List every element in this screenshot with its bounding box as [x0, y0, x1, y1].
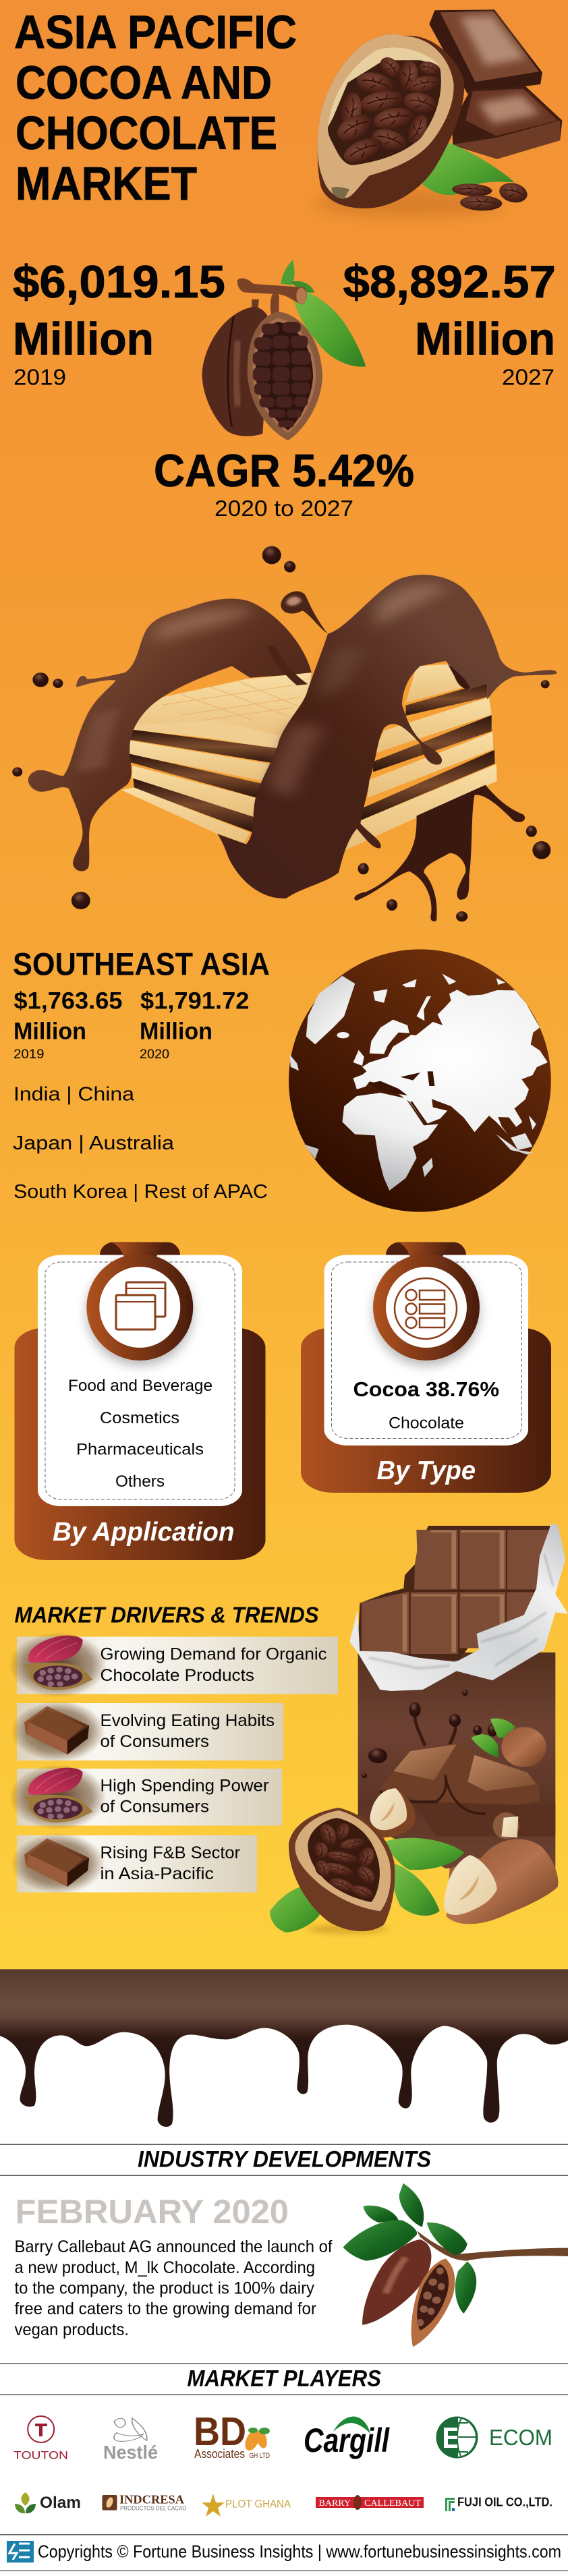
icon: cocoa pods	[9, 1632, 107, 1698]
logo: touton	[13, 2416, 68, 2462]
heading: market players: MARKET PLAYERS	[188, 2366, 381, 2392]
stat: CAGR: 2020 to 2027	[215, 496, 353, 521]
stat: southeast asia 2020	[140, 988, 250, 1062]
dashed border	[45, 1262, 235, 1499]
panel background	[15, 1327, 266, 1560]
heading: southeast asia: SOUTHEAST ASIA	[13, 946, 270, 982]
stat: CAGR	[154, 445, 414, 521]
title: COCOA AND	[16, 57, 272, 109]
stat: CAGR: CAGR 5.42%	[154, 445, 414, 496]
logo: bd associates	[194, 2409, 270, 2461]
logo: ecom	[436, 2416, 552, 2458]
stat: 2019 market size: $6,019.15	[13, 256, 225, 308]
logo: nestle: Nestlé	[103, 2442, 158, 2463]
list: applications: Pharmaceuticals	[76, 1441, 204, 1458]
banner: growing demand for organic chocolate products: Growing Demand for Organic	[100, 1644, 326, 1663]
list: applications	[68, 1377, 212, 1491]
banner: rising food and beverage sector: Rising F&B Sector	[100, 1843, 240, 1862]
logo: olam: Olam	[40, 2494, 81, 2512]
strap and ring	[86, 1242, 193, 1361]
banner: high spending power of consumers: High Spending Power	[100, 1777, 268, 1796]
text: development description: a new product, M_lk Chocolate. According	[15, 2258, 315, 2277]
chocolate drip band	[0, 1969, 568, 2127]
logo: plot ghana: PLOT GHANA	[225, 2497, 291, 2511]
list: applications: Cosmetics	[100, 1409, 179, 1427]
text: development description: free and caters to the growing demand for	[15, 2299, 316, 2318]
strap and ring	[373, 1242, 480, 1361]
banner: growing demand for organic chocolate products	[9, 1632, 338, 1698]
panel background	[301, 1327, 551, 1493]
icon: cocoa pods	[9, 1765, 107, 1830]
logo: barry callebaut	[316, 2495, 424, 2510]
list: countries: India | China	[13, 1083, 135, 1105]
logo: olam	[15, 2492, 81, 2513]
stat: cocoa share: Cocoa 38.76%	[353, 1377, 499, 1401]
logo: ecom: ECOM	[489, 2425, 552, 2450]
stat: southeast asia 2019: 2019	[13, 1048, 45, 1062]
banner: high spending power of consumers	[9, 1765, 282, 1830]
illustration: open cocoa pod with chocolate pieces	[315, 9, 562, 217]
icon: fortune business insights logo	[7, 2541, 34, 2563]
logo: nestle	[103, 2418, 158, 2463]
list: applications: Food and Beverage	[68, 1377, 212, 1395]
text: development description: Barry Callebaut AG announced the launch of	[15, 2237, 333, 2256]
list: applications: Others	[115, 1472, 165, 1491]
icon: chocolate piece	[11, 1701, 105, 1762]
page background	[0, 0, 568, 1970]
icon: globe	[289, 949, 551, 1212]
text: development description	[15, 2237, 333, 2339]
banner: evolving eating habits of consumers: of Consumers	[100, 1732, 209, 1751]
banner: evolving eating habits of consumers	[11, 1701, 283, 1762]
stat: 2027 market size: $8,892.57	[343, 256, 556, 308]
label: chocolate: Chocolate	[389, 1414, 464, 1433]
logo: bd associates: Associates	[194, 2447, 245, 2461]
stat: southeast asia 2019	[13, 988, 123, 1062]
stat: southeast asia 2019: $1,763.65	[13, 988, 123, 1014]
hanger loop	[100, 1242, 180, 1255]
icon: chocolate piece	[11, 1833, 105, 1894]
stat: 2019 market size: Million	[13, 313, 154, 364]
stat: 2019 market size: 2019	[13, 364, 66, 390]
white card	[324, 1255, 528, 1446]
banner: evolving eating habits of consumers: Evolving Eating Habits	[100, 1711, 275, 1730]
illustration: cocoa pods on branch	[202, 260, 366, 440]
stat: southeast asia 2020: Million	[140, 1019, 212, 1044]
logo: barry callebaut: BARRY	[318, 2498, 351, 2509]
list: countries: Japan | Australia	[13, 1133, 175, 1154]
stat: southeast asia 2020: 2020	[140, 1048, 169, 1062]
stat: southeast asia 2019: Million	[13, 1019, 86, 1044]
icon: windows	[116, 1282, 165, 1329]
footer: copyright	[0, 2534, 568, 2571]
stat: 2027 market size: Million	[415, 313, 555, 364]
panel: by type	[301, 1242, 551, 1493]
logo: cargill: Cargill	[304, 2422, 390, 2459]
stat: southeast asia 2020: $1,791.72	[140, 988, 250, 1014]
logo: fuji oil: FUJI OIL CO.,LTD.	[457, 2496, 552, 2509]
title: ASIA PACIFIC	[14, 5, 297, 58]
stat: 2027 market size: 2027	[502, 364, 555, 390]
illustration: open cocoa pod with leaves	[270, 1808, 395, 1934]
logo: plot ghana	[202, 2494, 291, 2517]
title	[14, 5, 297, 210]
heading: industry developments: INDUSTRY DEVELOPMENTS	[138, 2146, 431, 2172]
illustration: cocoa branch	[343, 2183, 568, 2347]
banner: growing demand for organic chocolate products: Chocolate Products	[100, 1666, 254, 1685]
logo: barry callebaut: CALLEBAUT	[364, 2498, 421, 2509]
banner: rising food and beverage sector	[11, 1833, 257, 1894]
logo: bd associates: BD	[194, 2409, 246, 2454]
label: by type: By Type	[376, 1456, 476, 1485]
title: CHOCOLATE	[16, 107, 277, 159]
logo: indcresa: INDCRESA	[119, 2493, 184, 2507]
hanger loop	[386, 1242, 466, 1255]
banner: high spending power of consumers: of Consumers	[100, 1797, 209, 1816]
illustration: chocolate-coated wafer with splashes	[12, 546, 557, 921]
logo: indcresa: PRODUCTOS DEL CACAO	[120, 2505, 186, 2512]
white card	[38, 1255, 242, 1506]
logo: indcresa	[103, 2493, 186, 2512]
date: february 2020: FEBRUARY 2020	[15, 2193, 289, 2231]
list: countries: South Korea | Rest of APAC	[13, 1181, 268, 1203]
logo: bd associates: GH LTD	[250, 2452, 270, 2460]
panel: by application	[15, 1242, 266, 1560]
label: by application: By Application	[53, 1518, 235, 1547]
list: countries	[13, 1083, 268, 1203]
stat: 2019 market size	[13, 256, 225, 390]
text: development description: to the company, the product is 100% dairy	[15, 2279, 314, 2297]
banner: rising food and beverage sector: in Asia-Pacific	[100, 1864, 214, 1883]
text: development description: vegan products.	[15, 2320, 129, 2339]
stat: 2027 market size	[343, 256, 556, 390]
heading: market drivers and trends: MARKET DRIVERS & TRENDS	[15, 1603, 318, 1627]
illustration: chocolate bar in foil	[349, 1524, 568, 1924]
icon: list	[395, 1278, 457, 1339]
title: MARKET	[16, 157, 197, 210]
logo: touton: TOUTON	[13, 2449, 68, 2462]
dashed border	[332, 1262, 522, 1438]
